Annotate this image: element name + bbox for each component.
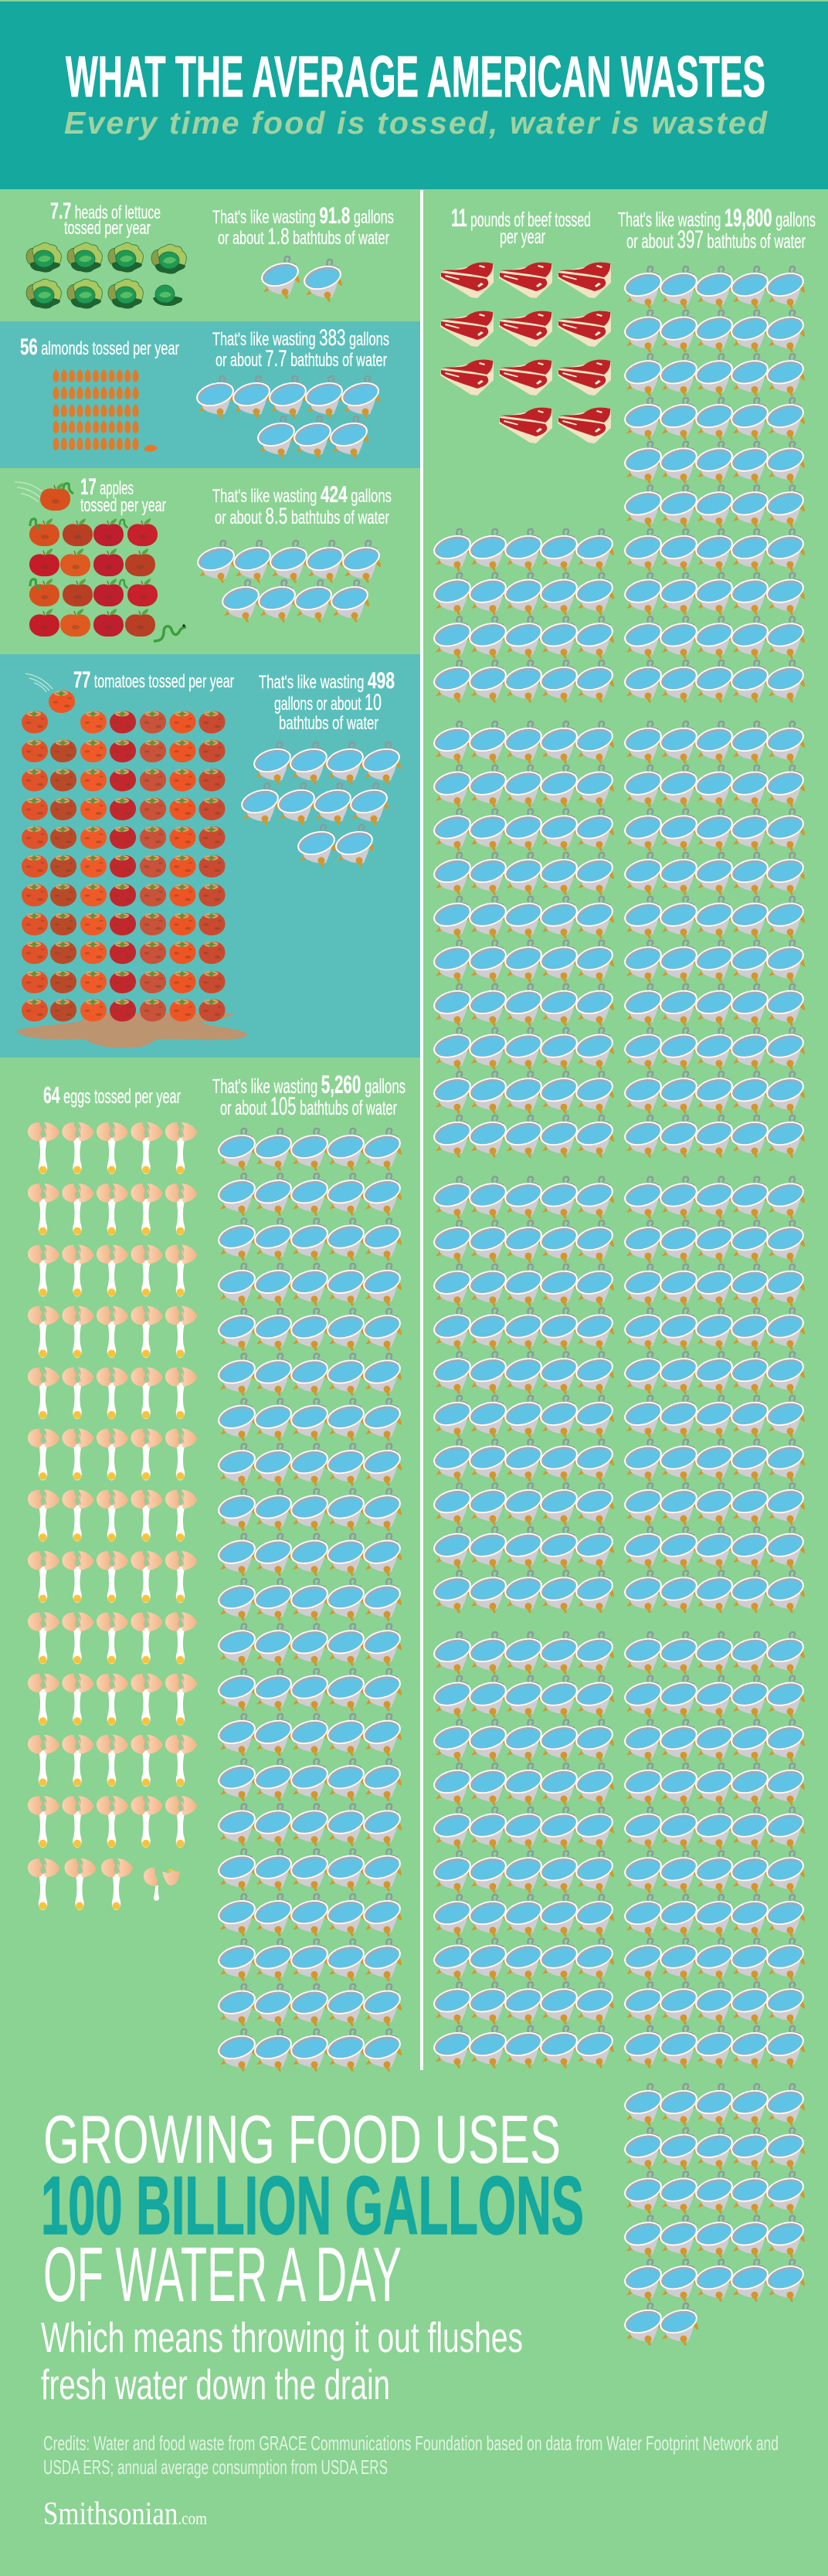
motion lines [25,674,53,692]
steaks [440,263,611,443]
header band [0,2,828,189]
almond grid [53,369,158,452]
egg grid [28,1122,197,1910]
headline line three: OF WATER A DAY [43,2232,402,2318]
almond bathtubs [193,376,382,459]
lettuce water label [212,203,394,249]
motion lines [15,482,42,502]
lettuce bathtubs [258,256,344,301]
tomatoes water label [259,668,395,734]
lettuce water label: That's like wasting 91.8 gallons [212,203,394,229]
lettuce water label: or about 1.8 bathtubs of water [218,224,389,249]
worm [154,624,186,641]
almonds label: 56 almonds tossed per year [20,334,179,360]
supporting text: Which means throwing it out flushes [41,2313,523,2361]
eggs water label [212,1071,406,1120]
panel: eggs [28,1071,406,2072]
panel: almonds [0,321,420,468]
apple bathtubs [194,541,383,623]
panel: lettuce [0,190,420,321]
closing statement [41,2101,584,2408]
eggs label: 64 eggs tossed per year [43,1081,181,1108]
egg bathtubs [215,1128,404,2072]
credits: USDA ERS; annual average consumption from USDA ERS [43,2456,388,2479]
tomatoes water label: gallons or about 10 [274,690,382,715]
beef label [451,204,591,248]
apples label [80,474,166,516]
almonds water label: or about 7.7 bathtubs of water [215,346,387,372]
eggs water label: That's like wasting 5,260 gallons [212,1071,406,1098]
panel: tomatoes [0,654,420,1057]
beef water label [618,204,816,253]
eggs water label: or about 105 bathtubs of water [220,1092,397,1120]
supporting text [41,2313,523,2408]
tomato splat [17,1013,247,1048]
subtitle: Every time food is tossed, water is wasted [64,105,768,141]
tomatoes water label: bathtubs of water [279,713,378,734]
falling apple [40,483,73,511]
beef bathtubs [430,266,807,2345]
tomatoes label: 77 tomatoes tossed per year [73,667,234,693]
almonds water label [212,325,389,372]
almonds water label: That's like wasting 383 gallons [212,325,389,351]
tomatoes water label: That's like wasting 498 [259,668,395,694]
falling tomato [49,691,75,713]
headline line one: GROWING FOOD USES [43,2101,561,2177]
beef label: 11 pounds of beef tossed [451,204,591,232]
lettuce label: 7.7 heads of lettuce [50,199,161,224]
beef label: per year [500,225,545,248]
lettuce label: tossed per year [64,218,151,239]
supporting text: fresh water down the drain [41,2360,390,2408]
apples label: tossed per year [80,495,166,516]
lettuce label [50,199,161,239]
lettuce heads [26,243,186,309]
apples water label [212,482,392,529]
credits [43,2432,779,2479]
Smithsonian logo: Smithsonian.com [43,2496,207,2532]
tomato bathtubs [238,742,403,867]
apple grid [29,518,158,636]
apples water label: or about 8.5 bathtubs of water [215,504,389,529]
panel: beef [430,204,816,2345]
tomato grid [22,711,226,1021]
apples label: 17 apples [80,474,134,500]
panel: apples [0,468,420,654]
apples water label: That's like wasting 424 gallons [212,482,392,507]
